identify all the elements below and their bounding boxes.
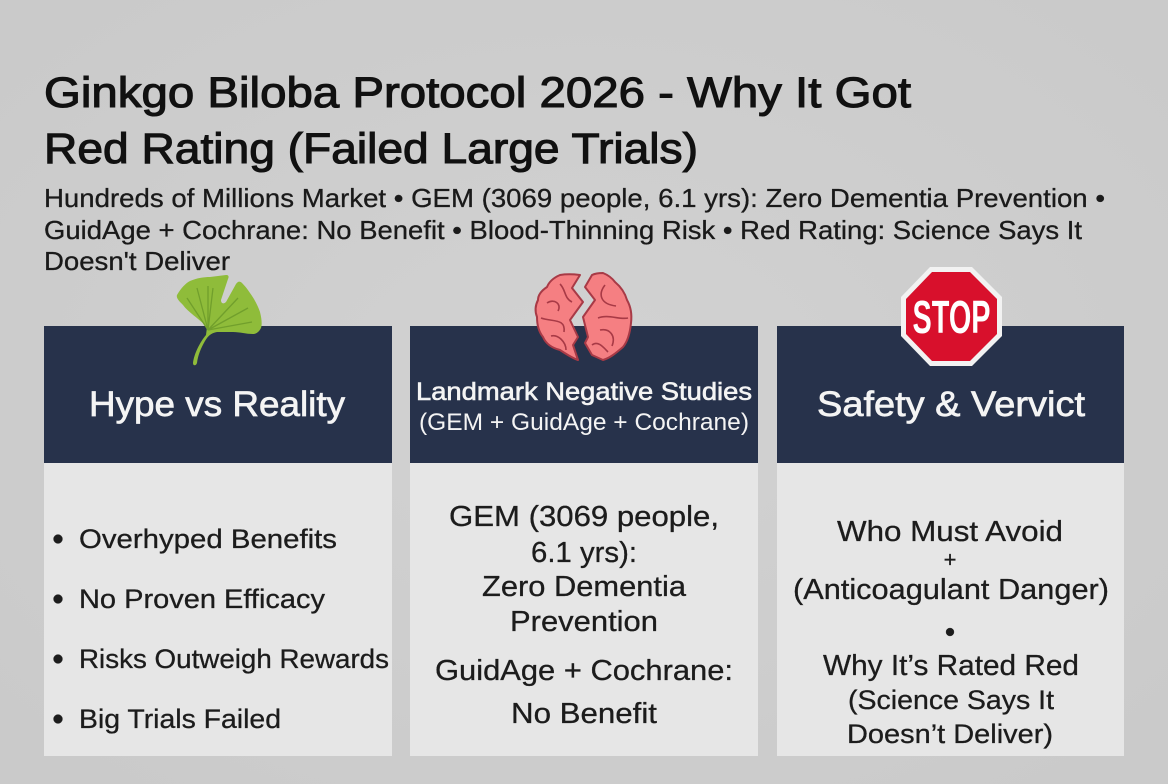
body text: safety: (Science Says It: [848, 685, 1055, 715]
panel header: safety: [777, 326, 1124, 463]
body text: studies: [435, 501, 733, 730]
panel header: hype vs reality: [44, 326, 392, 463]
subtitle: GuidAge + Cochrane: No Benefit • Blood-Thinning Risk • Red Rating: Science Says It: [44, 215, 1083, 245]
icon: broken brain: [536, 273, 631, 360]
panel: hype vs reality: [44, 275, 392, 756]
icon: stop sign: [901, 267, 1002, 366]
body text: safety: +: [944, 547, 956, 572]
heading: studies: [416, 378, 752, 436]
subtitle: Hundreds of Millions Market • GEM (3069 people, 6.1 yrs): Zero Dementia Prevention •: [44, 183, 1105, 213]
bullet list: Overhyped Benefits: [79, 524, 337, 554]
body text: studies: Prevention: [510, 606, 658, 638]
body text: safety: Doesn’t Deliver): [847, 719, 1053, 749]
body text: safety: Who Must Avoid: [837, 516, 1063, 548]
icon: ginkgo leaf: [177, 275, 262, 365]
title: Ginkgo Biloba Protocol 2026 - Why It Got: [44, 69, 911, 117]
title: [44, 69, 911, 173]
panel body: safety: [777, 463, 1124, 756]
bullet list: Big Trials Failed: [79, 704, 281, 734]
panel: landmark negative studies: [410, 273, 758, 756]
heading: studies: Landmark Negative Studies: [416, 378, 752, 406]
body text: studies: GEM (3069 people,: [449, 501, 719, 533]
bullet list: [54, 524, 389, 734]
body text: studies: Zero Dementia: [482, 571, 687, 603]
body text: safety: Why It’s Rated Red: [823, 650, 1079, 682]
bullet list: No Proven Efficacy: [79, 584, 326, 614]
panel body: hype vs reality: [44, 463, 392, 756]
body text: safety: (Anticoagulant Danger): [793, 574, 1109, 606]
panel: safety and verdict: [777, 267, 1124, 756]
icon: stop sign: STOP: [912, 291, 990, 343]
heading: safety: Safety & Vervict: [817, 385, 1085, 424]
subtitle: [44, 183, 1105, 276]
panel body: studies: [410, 463, 758, 756]
heading: hype vs reality: Hype vs Reality: [89, 385, 346, 424]
body text: studies: GuidAge + Cochrane:: [435, 655, 733, 687]
body text: studies: No Benefit: [511, 698, 657, 730]
title: Red Rating (Failed Large Trials): [44, 125, 698, 173]
panel header: studies: [410, 326, 758, 463]
heading: studies: (GEM + GuidAge + Cochrane): [419, 409, 749, 436]
subtitle: Doesn't Deliver: [44, 246, 230, 276]
body text: safety: [793, 516, 1109, 749]
body text: studies: 6.1 yrs):: [531, 537, 637, 569]
bullet list: Risks Outweigh Rewards: [79, 644, 389, 674]
